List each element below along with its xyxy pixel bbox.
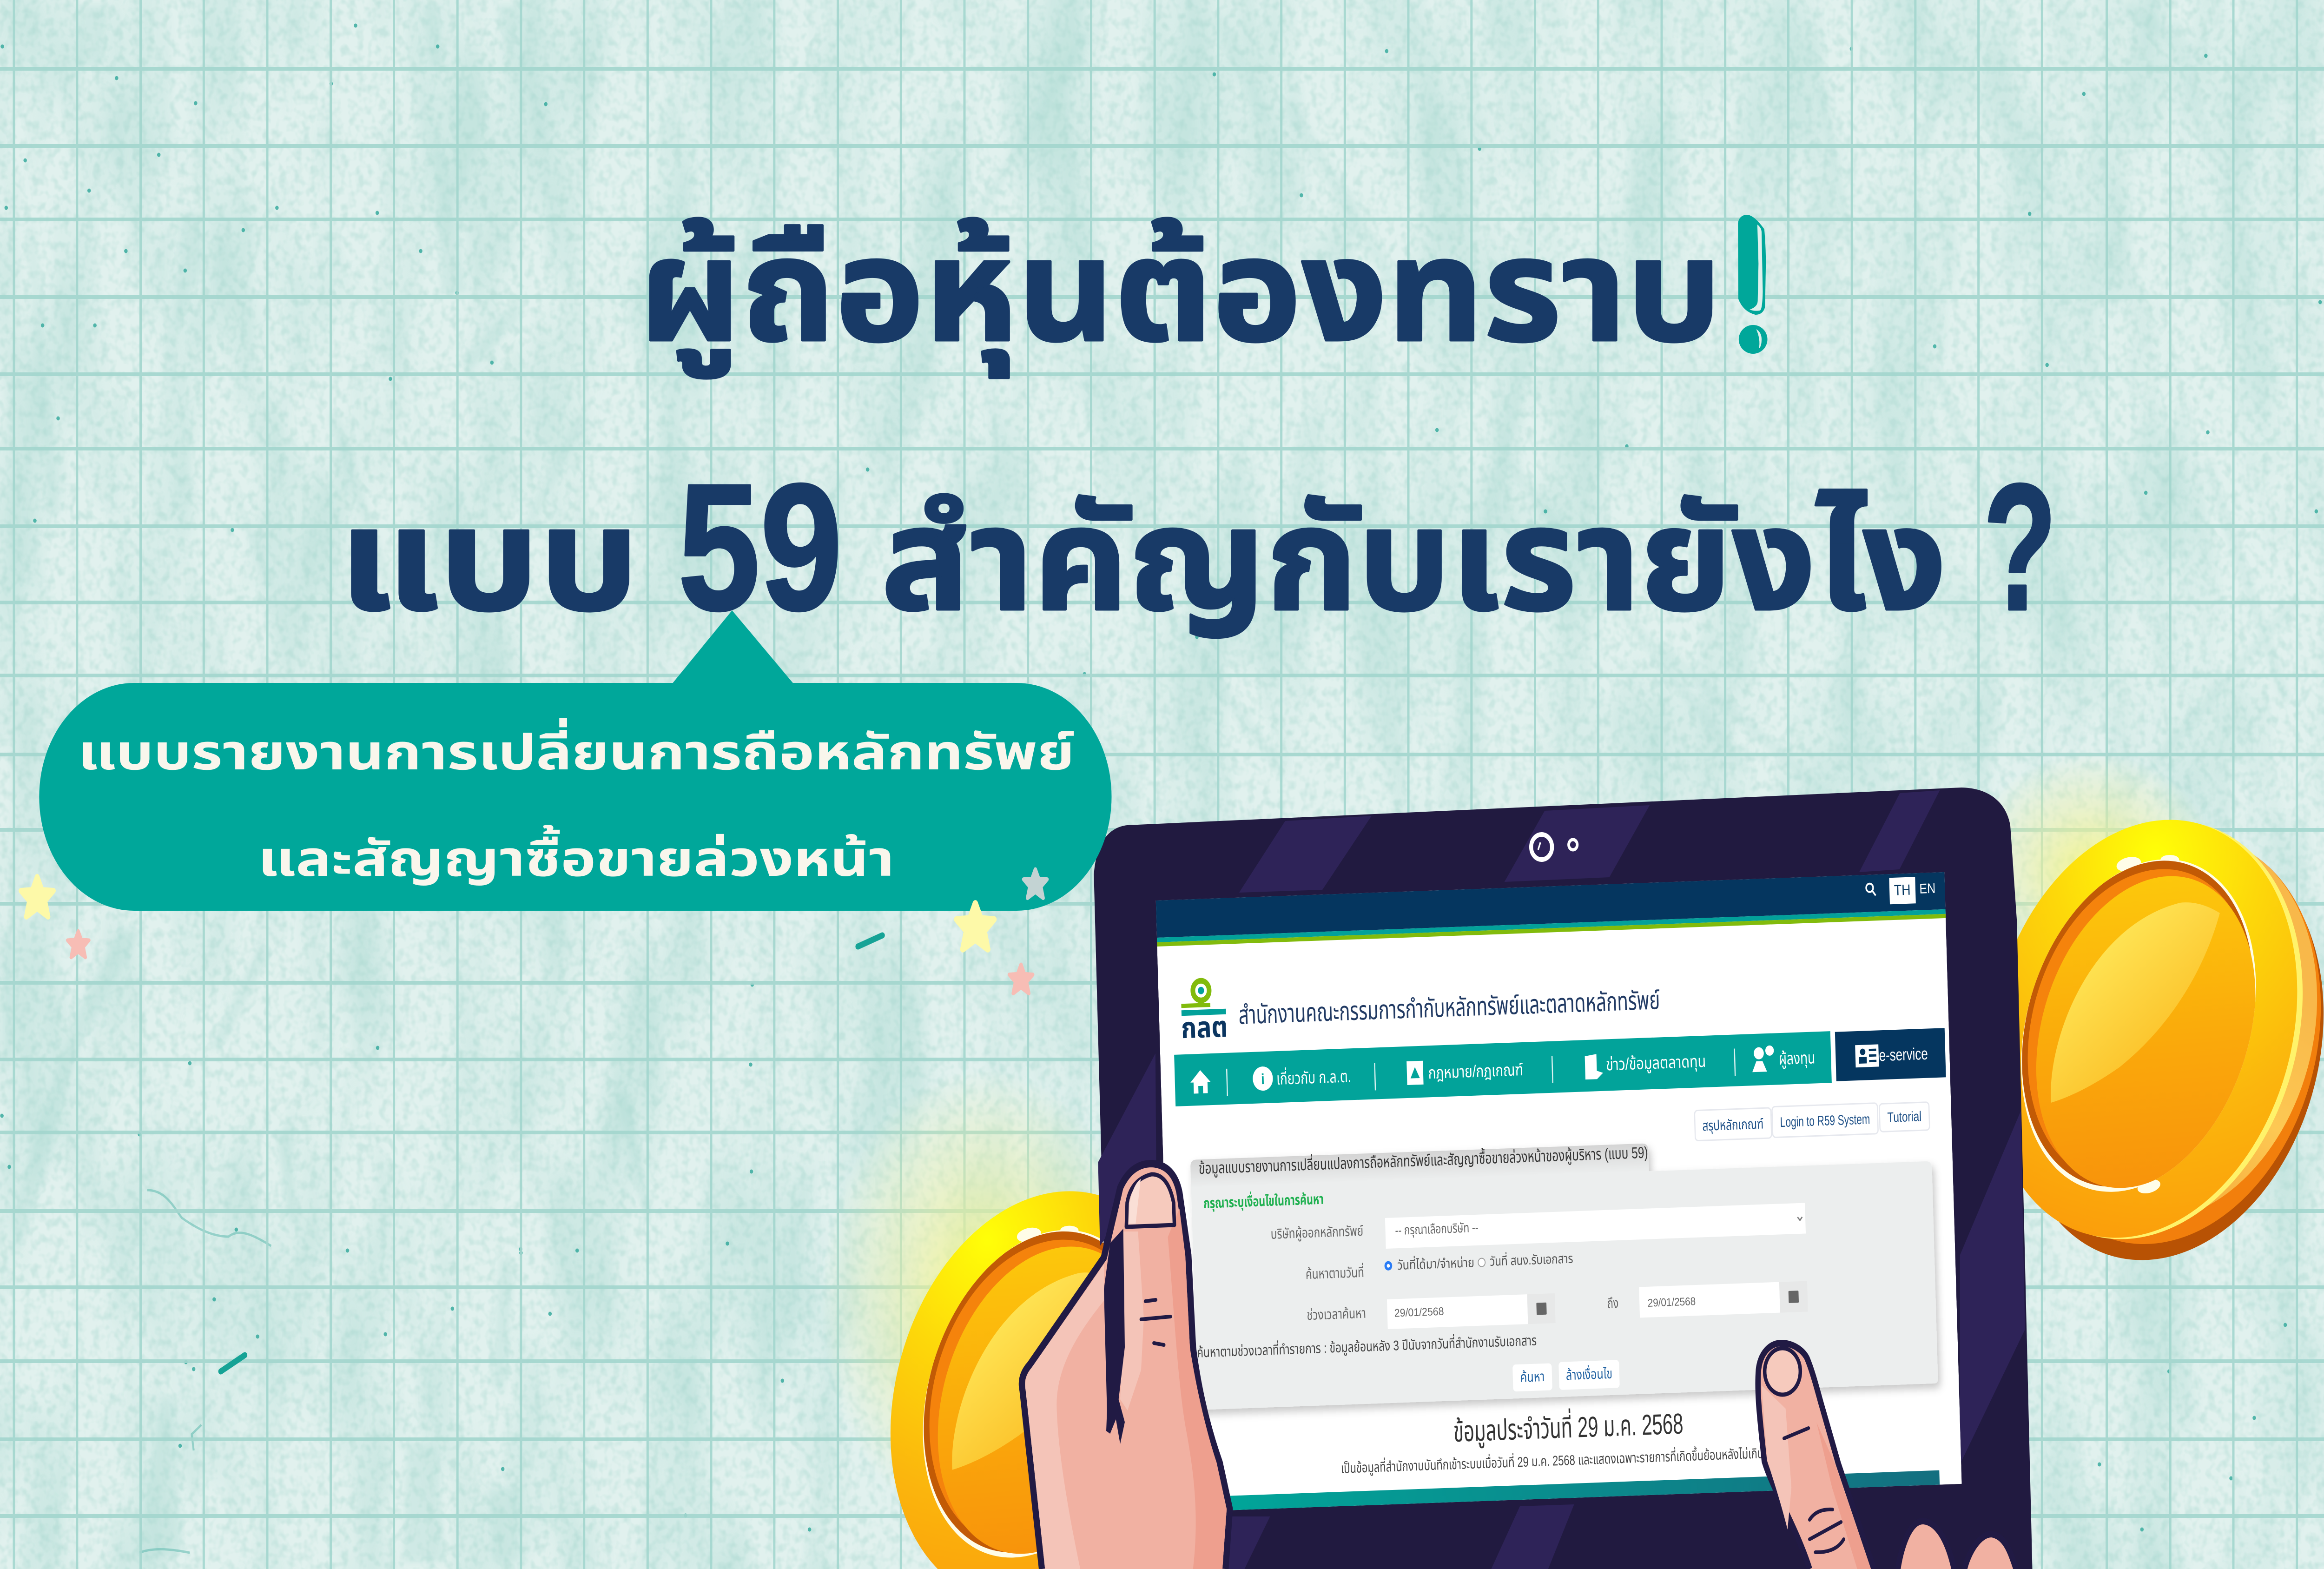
- teal specks: [221, 935, 882, 1371]
- search panel: กรุณาระบุเงื่อนไขในการค้นหา: [1203, 1189, 1324, 1212]
- link buttons: [1695, 1101, 1930, 1141]
- bubble text line 1: แบบรายงานการเปลี่ยนการถือหลักทรัพย์: [78, 718, 1075, 780]
- stars: [21, 869, 1047, 993]
- site title: สำนักงานคณะกรรมการกำกับหลักทรัพย์และตลาดหลักทรัพย์: [1238, 985, 1660, 1030]
- title line 2: 59: [678, 446, 843, 648]
- title line 1: ผู้ถือหุ้นต้องทราบ: [639, 211, 1722, 378]
- site header bar: TH: [1894, 881, 1911, 899]
- search panel: [1190, 1132, 1938, 1410]
- search panel: ข้อมูลแบบรายงานการเปลี่ยนแปลงการถือหลักทรัพย์และสัญญาซื้อขายล่วงหน้าของผู้บริหาร (แบบ 59): [1198, 1142, 1648, 1178]
- screen: website: [1156, 872, 1962, 1512]
- icon: gold coin left: [878, 1182, 1200, 1569]
- search panel: ค้นหา: [1520, 1369, 1545, 1385]
- date description: เป็นข้อมูลที่สำนักงานบันทึกเข้าระบบเมื่อวันที่ 29 ม.ค. 2568 และแสดงเฉพาะรายการที่เกิดขึ้นย้อนหลังไม่เกิน: [1340, 1444, 1764, 1477]
- bubble text line 2: และสัญญาซื้อขายล่วงหน้า: [258, 824, 894, 887]
- title line 2: สำคัญกับเรายังไง: [881, 480, 1947, 640]
- title line 2: แบบ: [339, 480, 639, 640]
- link buttons: สรุปหลักเกณฑ์: [1702, 1116, 1764, 1134]
- search panel: วันที่ สนง.รับเอกสาร: [1490, 1250, 1573, 1269]
- site header bar: EN: [1919, 880, 1936, 896]
- logo: [1180, 980, 1228, 1045]
- site header bar: [1156, 872, 1946, 947]
- logo: กลต: [1181, 1011, 1228, 1045]
- search panel: ล้างเงื่อนไข: [1565, 1364, 1612, 1383]
- navigation bar: i: [1261, 1071, 1265, 1088]
- tablet: [1094, 788, 2032, 1569]
- search panel: ค้นหาตามวันที่: [1305, 1263, 1364, 1282]
- results table header: [1200, 1470, 1940, 1511]
- link buttons: Login to R59 System: [1780, 1111, 1870, 1130]
- date heading: ข้อมูลประจำวันที่ 29 ม.ค. 2568: [1453, 1404, 1684, 1449]
- search panel: บริษัทผู้ออกหลักทรัพย์: [1270, 1223, 1364, 1243]
- search panel: ค้นหาตามช่วงเวลาที่ทำรายการ : ข้อมูลย้อนหลัง 3 ปีนับจากวันที่สำนักงานรับเอกสาร: [1197, 1331, 1537, 1361]
- other fingers: [1898, 1521, 1954, 1569]
- navigation bar: [1174, 1027, 1946, 1106]
- search panel: ช่วงเวลาค้นหา: [1307, 1305, 1366, 1323]
- navigation bar: เกี่ยวกับ ก.ล.ต.: [1276, 1065, 1352, 1089]
- navigation bar: ข่าว/ข้อมูลตลาดทุน: [1606, 1052, 1706, 1075]
- search panel: ถึง: [1607, 1295, 1619, 1311]
- exclamation mark: [1738, 215, 1767, 354]
- thumb nail: [1126, 1174, 1175, 1227]
- search panel: 29/01/2568: [1394, 1305, 1444, 1319]
- speech bubble: [39, 610, 1112, 911]
- coin glow left: [821, 1069, 1147, 1534]
- left hand: [1022, 1164, 1230, 1569]
- bezel stripes: [1098, 790, 2025, 1569]
- right hand: [1758, 1343, 2016, 1569]
- camera: [1531, 834, 1577, 860]
- search panel: -- กรุณาเลือกบริษัท --: [1395, 1221, 1479, 1238]
- search panel: 29/01/2568: [1647, 1295, 1696, 1309]
- search panel: วันที่ได้มา/จำหน่าย: [1397, 1254, 1474, 1273]
- title line 2: [339, 446, 2057, 648]
- coin glow right: [1964, 753, 2219, 995]
- title line 2: ?: [1983, 446, 2057, 648]
- pointing finger: [1758, 1343, 1874, 1569]
- navigation bar: ผู้ลงทุน: [1778, 1049, 1816, 1069]
- icon: gold coin right: [1929, 755, 2324, 1325]
- link buttons: Tutorial: [1887, 1108, 1921, 1125]
- navigation bar: e-service: [1879, 1045, 1928, 1065]
- tablet bezel: [1094, 788, 2032, 1569]
- navigation bar: กฎหมาย/กฎเกณฑ์: [1428, 1060, 1524, 1083]
